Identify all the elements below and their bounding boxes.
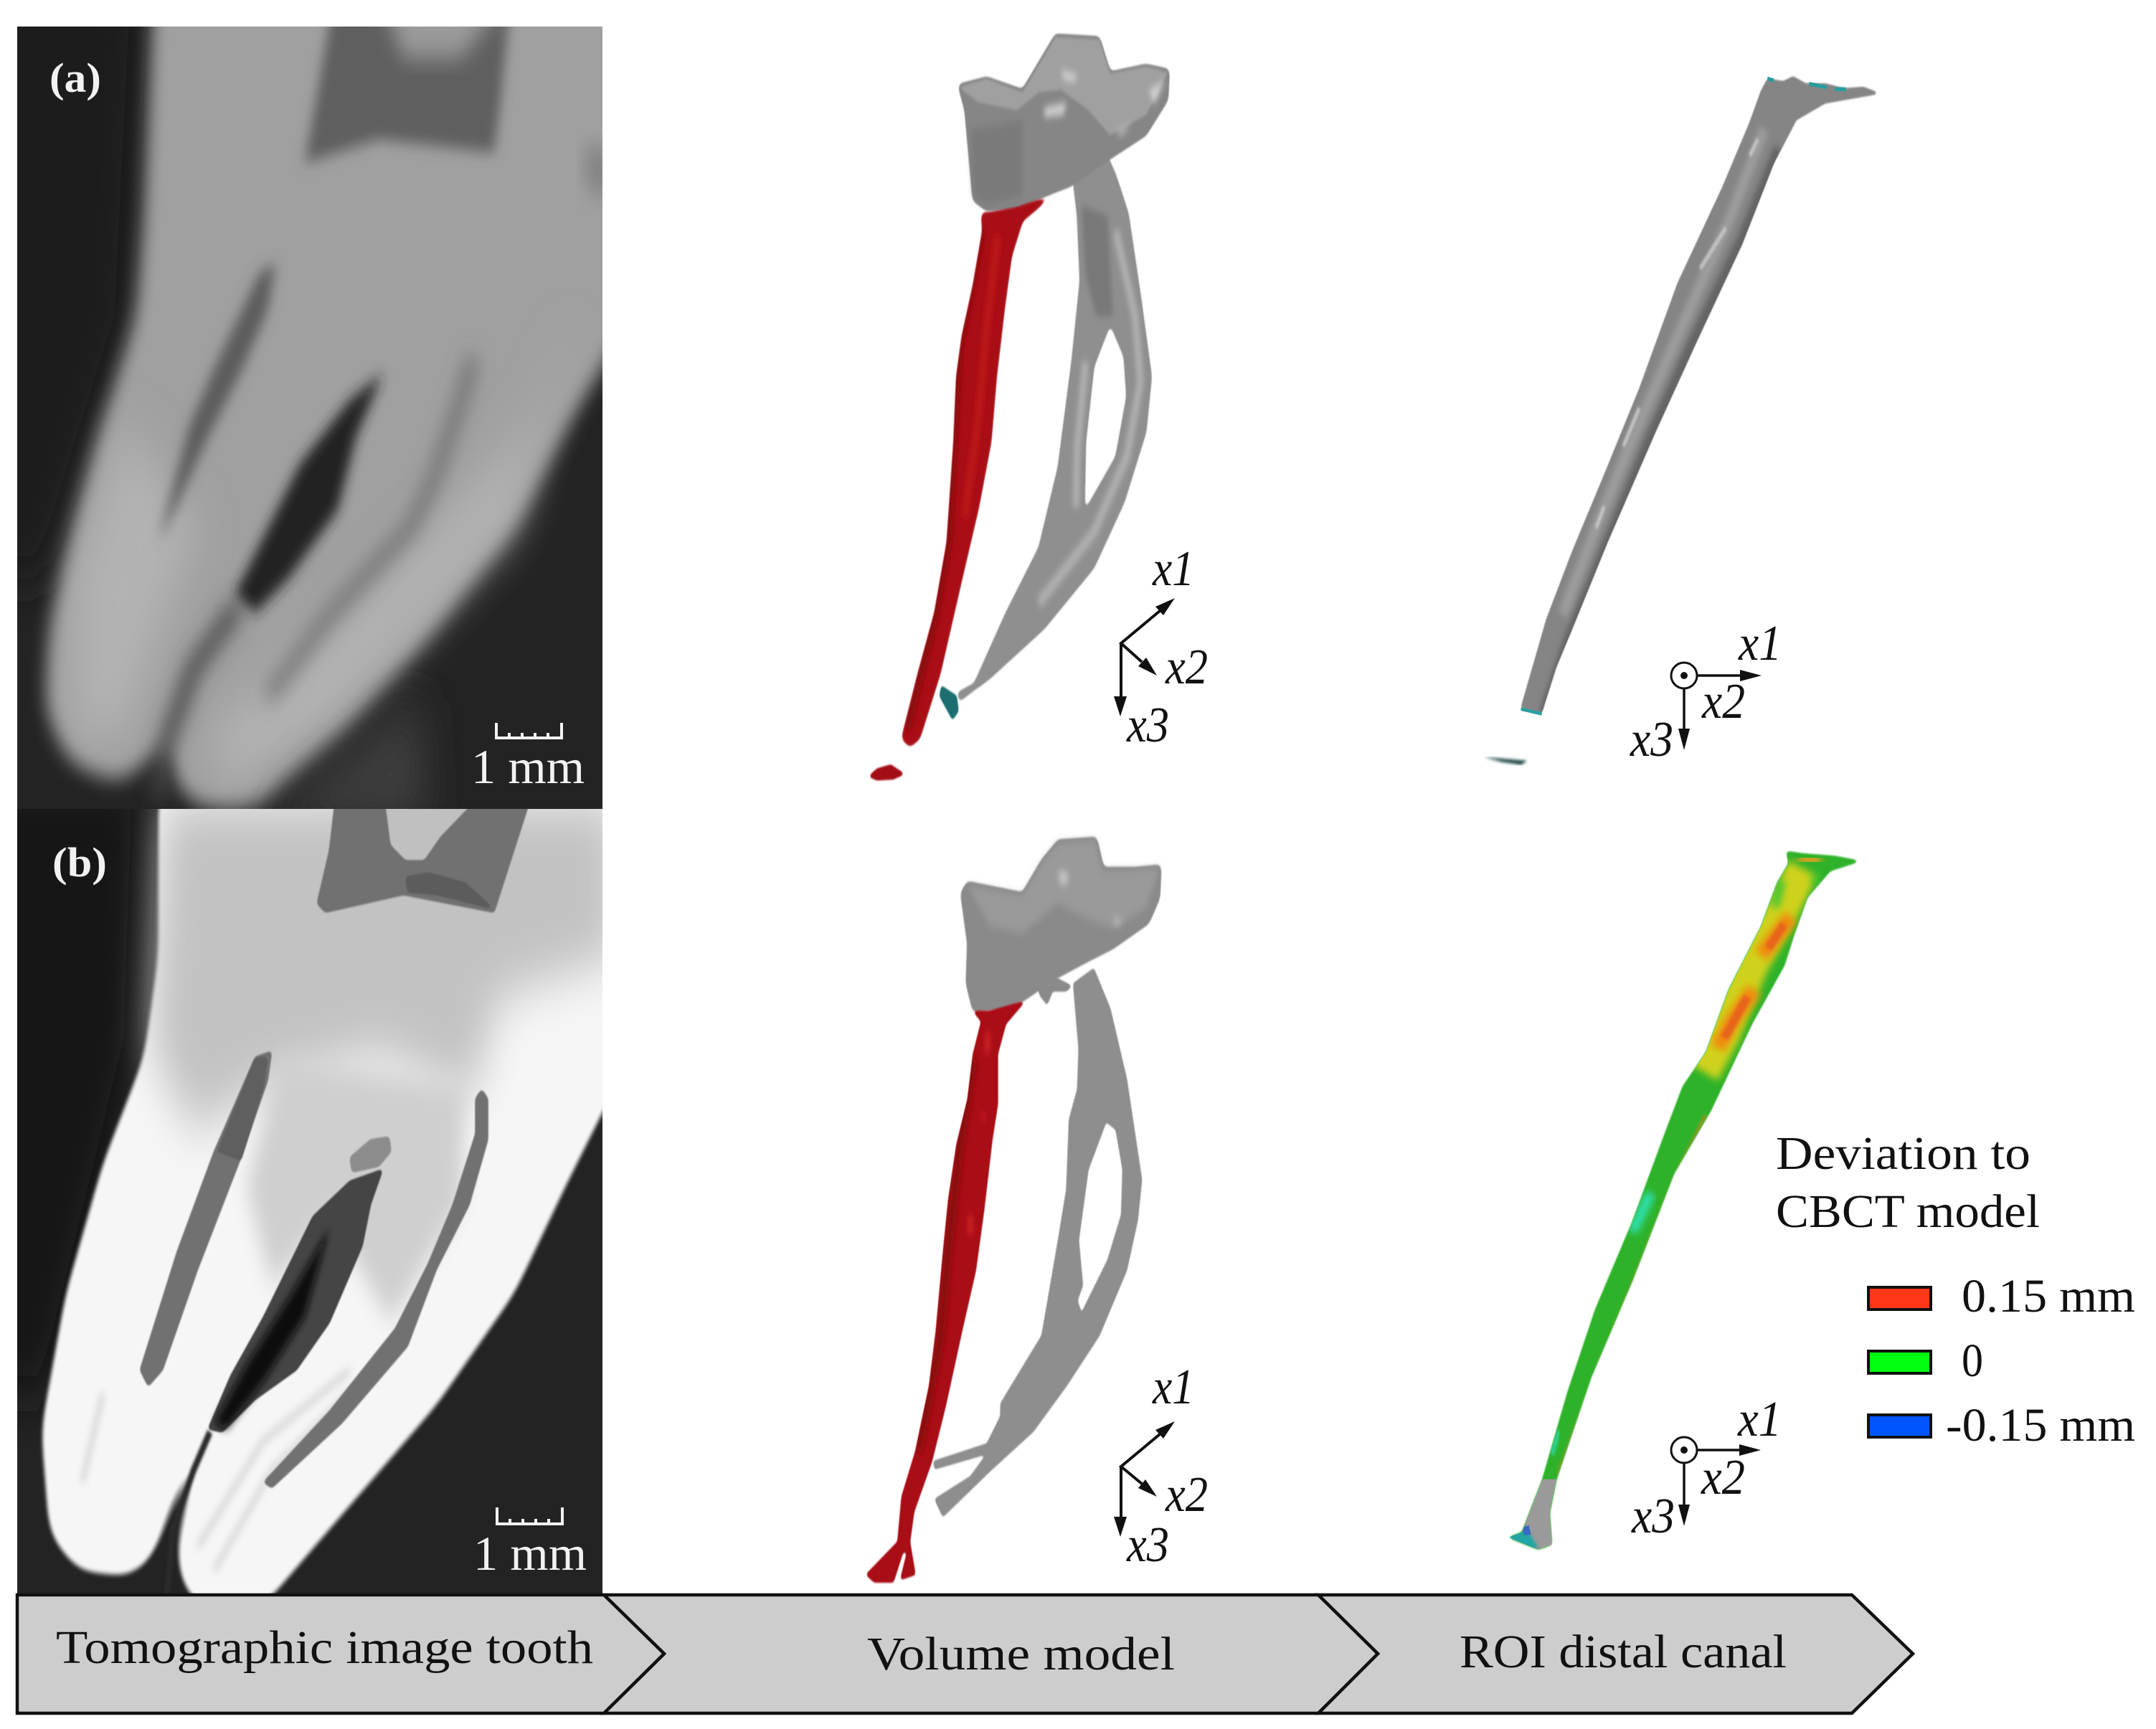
crown highlights (b) bbox=[1058, 871, 1124, 926]
furcation tip (b) bbox=[350, 1137, 391, 1173]
legend swatch blue bbox=[1868, 1415, 1931, 1437]
crown front shade (a) bbox=[970, 120, 1023, 206]
axes ROI (b) bbox=[1631, 1392, 1782, 1544]
lateral shade (a) bbox=[585, 147, 610, 200]
furcation black core (b) bbox=[214, 1228, 329, 1429]
left canal upper part (b) bbox=[217, 1057, 268, 1160]
legend swatch red bbox=[1868, 1287, 1931, 1309]
scale bar (a) bbox=[496, 723, 562, 738]
axes ROI (b): x1 bbox=[1737, 1392, 1782, 1447]
axes ROI (a): x3 bbox=[1630, 712, 1673, 767]
axes (a) volume bbox=[1114, 541, 1208, 753]
other canals gray (a) bbox=[957, 150, 1151, 701]
legend heading bbox=[1776, 1127, 2040, 1238]
crown top face (a) bbox=[960, 37, 1168, 135]
right canal (b) bbox=[263, 1089, 488, 1488]
other canals gray (b) bbox=[933, 968, 1142, 1517]
legend: deviation to CBCT model bbox=[1776, 1127, 2135, 1451]
lighter lower roots (a) bbox=[47, 426, 564, 807]
legend swatch green bbox=[1868, 1351, 1931, 1373]
axes (b) volume: x1 bbox=[1152, 1360, 1194, 1415]
teal rim bottom bbox=[1521, 709, 1542, 714]
crown top face (b) bbox=[968, 840, 1160, 933]
panel: (a) CBCT tomographic image bbox=[17, 27, 602, 809]
central dark furcation (a) bbox=[235, 374, 383, 613]
pulp chamber (a) bbox=[305, 0, 511, 163]
axes ROI (a): x2 bbox=[1701, 674, 1745, 729]
panel letter (a): (a) bbox=[49, 55, 101, 101]
tooth body (a) bbox=[45, 0, 646, 807]
furcation tail (a) bbox=[159, 605, 239, 800]
canal body gray bbox=[1521, 77, 1879, 713]
canal shading dark (a) bbox=[1082, 206, 1113, 316]
ROI distal canal deviation map (b) bbox=[1499, 851, 1860, 1557]
legend heading: CBCT model bbox=[1776, 1185, 2040, 1238]
pulp floor darker band (b) bbox=[405, 873, 494, 909]
right canal (a) bbox=[268, 358, 473, 697]
axes (b) volume: x3 bbox=[1126, 1517, 1169, 1573]
scale label (a): 1 mm bbox=[471, 739, 585, 794]
axes ROI (b): x3 bbox=[1631, 1489, 1675, 1544]
canal shading light (a) bbox=[1039, 231, 1140, 603]
axes (a) volume: x3 bbox=[1126, 698, 1169, 753]
separated dark fragment bbox=[1484, 757, 1527, 764]
arrow: Tomographic image tooth: Tomographic image tooth bbox=[56, 1621, 593, 1674]
arrow: ROI distal canal bbox=[1318, 1595, 1913, 1713]
volume model (b) bbox=[866, 838, 1161, 1582]
dark left background (a) bbox=[115, 28, 129, 293]
axes ROI (a): x1 bbox=[1738, 616, 1782, 671]
bone haze bottom right (a) bbox=[277, 703, 435, 809]
axes ROI (b): x2 bbox=[1701, 1450, 1745, 1505]
underside fragments (b) bbox=[1036, 976, 1072, 1005]
tooth body (b) bbox=[41, 780, 642, 1606]
scale bar (b) bbox=[497, 1507, 562, 1524]
canal shading bbox=[1543, 130, 1779, 715]
left canal (a) bbox=[159, 263, 276, 542]
ROI distal canal gray (a) bbox=[1484, 77, 1879, 764]
arrow: Volume model bbox=[604, 1595, 1378, 1713]
distal canal red (b) bbox=[866, 1001, 1025, 1582]
arrow: Tomographic image tooth bbox=[17, 1595, 664, 1713]
axes (b) volume: x2 bbox=[1165, 1467, 1208, 1522]
upper dentine shading (b) bbox=[152, 803, 618, 1134]
legend label 0: 0 bbox=[1962, 1335, 1983, 1387]
crown light area (a) bbox=[382, 27, 498, 70]
legend label 0.15 mm: 0.15 mm bbox=[1962, 1270, 2135, 1322]
axes (a) volume: x2 bbox=[1165, 640, 1208, 695]
notch line between roots (b) bbox=[166, 1432, 210, 1597]
dentine between canals (b) bbox=[247, 1057, 465, 1323]
process arrows bar bbox=[17, 1595, 1913, 1713]
apical teal cap (a) bbox=[940, 686, 958, 720]
root streaks (b) bbox=[82, 1370, 354, 1571]
axes ROI (a) bbox=[1630, 616, 1782, 767]
left canal (b) bbox=[140, 1051, 272, 1386]
pulp chamber (b) bbox=[317, 797, 531, 912]
legend label -0.15 mm: -0.15 mm bbox=[1946, 1399, 2135, 1451]
central furcation (b) bbox=[208, 1169, 383, 1432]
crown (b) bbox=[960, 838, 1161, 1011]
legend heading: Deviation to bbox=[1776, 1127, 2030, 1180]
distal canal red (a) bbox=[902, 196, 1053, 747]
canal base green bbox=[1508, 851, 1860, 1550]
arrow: ROI distal canal: ROI distal canal bbox=[1460, 1626, 1787, 1678]
scale label (b): 1 mm bbox=[473, 1526, 587, 1581]
separated apical fragment red (a) bbox=[869, 765, 904, 780]
axes (a) volume: x1 bbox=[1152, 541, 1194, 597]
panel: (b) micro-CT tomographic image bbox=[0, 780, 642, 1606]
crown highlights (a) bbox=[1044, 70, 1166, 135]
volume model (a) bbox=[869, 34, 1169, 780]
axes (b) volume bbox=[1114, 1360, 1208, 1573]
arrow: Volume model: Volume model bbox=[867, 1628, 1175, 1680]
crown (a) bbox=[958, 34, 1169, 211]
deviation colours bbox=[1499, 858, 1821, 1557]
panel letter (b): (b) bbox=[52, 839, 107, 886]
dark left background (b) bbox=[0, 780, 144, 1393]
teal rim top bbox=[1767, 79, 1846, 89]
crown dentine island (b) bbox=[385, 797, 478, 859]
